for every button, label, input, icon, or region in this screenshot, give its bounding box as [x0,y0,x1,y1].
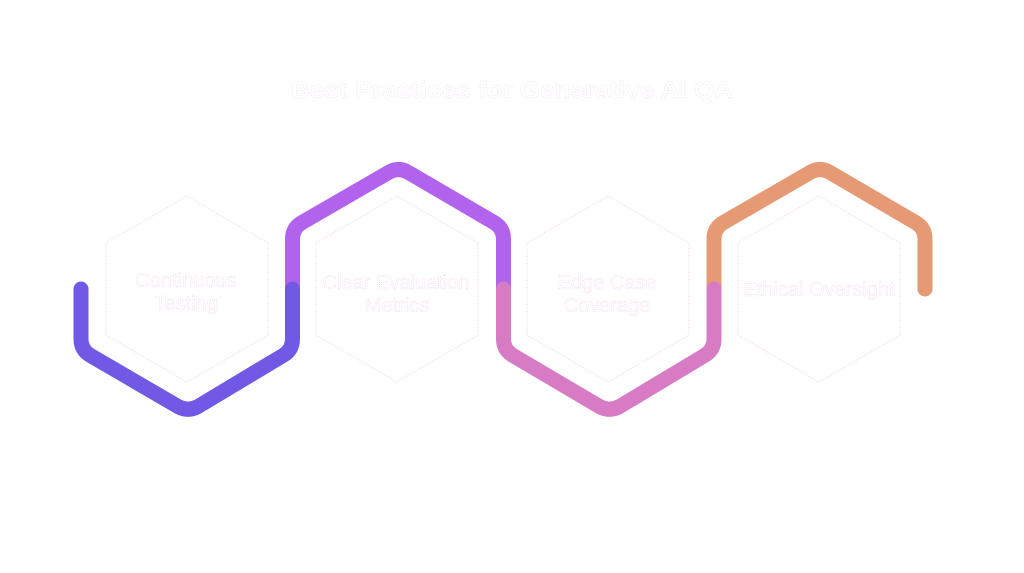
connector segment: orange [714,170,925,289]
connector segment: blue [81,289,292,409]
step 3: Edge Case Coverage [527,196,689,382]
label 2: Metrics [365,295,429,317]
label 1: Testing [154,293,218,315]
label 1: Continuous [135,270,237,292]
connector segment: purple [292,170,504,289]
connector segment: pink [504,289,714,409]
step 2: Clear Evaluation Metrics [316,196,478,382]
label 4: Ethical Oversight [743,279,895,301]
hexagon 2 [316,196,478,382]
hexagon 1 [106,196,268,382]
label 3: Edge Case [558,272,656,294]
title: Best Practices for Generative AI QA [291,77,733,104]
step 4: Ethical Oversight [738,196,900,382]
hexagon 4 [738,196,900,382]
hexagon 3 [527,196,689,382]
step 1: Continuous Testing [106,196,268,382]
label 2: Clear Evaluation [323,272,469,294]
label 3: Coverage [564,295,650,317]
